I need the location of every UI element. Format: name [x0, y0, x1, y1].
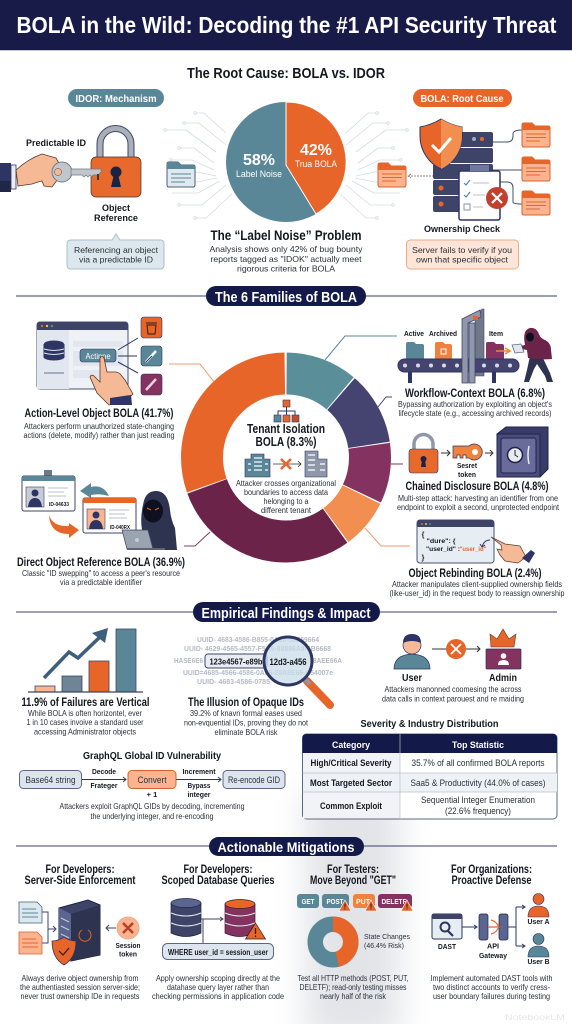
table: severity and industry: Common Exploit — [320, 801, 382, 811]
donut centre: tenant isolation: boundaries to access data — [244, 488, 328, 497]
panel: proactive defense: User A — [528, 917, 550, 926]
flow diagram: graphql global ID: the underlying integer, and re-encoding — [90, 811, 214, 821]
section heading: 6 families — [16, 286, 557, 306]
icon: server, shield, clipboard, folders: Ownership Check — [424, 224, 501, 235]
section heading: mitigations — [16, 837, 557, 856]
table: severity and industry — [302, 734, 557, 819]
panel: move beyond GET: POST — [326, 897, 344, 906]
panel: scoped database queries: WHERE user_id = session_user — [168, 948, 268, 957]
panel: workflow-context BOLA — [398, 309, 553, 418]
panel: illusion of opaque IDs: UUID- 4683-4586-B855-0A66-58E59664 — [197, 635, 320, 644]
heading: root cause: The Root Cause: BOLA vs. IDOR — [187, 65, 385, 82]
panel: action-level object BOLA — [24, 317, 175, 440]
callout: referencing an object — [67, 234, 164, 269]
panel: action-level object BOLA: Actinne — [86, 352, 111, 361]
panel: server-side enforcement — [19, 864, 141, 1001]
panel: proactive defense: two distinct accounts to verify cress- — [433, 982, 550, 992]
badge: IDOR mechanism — [68, 89, 164, 107]
panel: direct object reference BOLA: ID-040RX — [110, 525, 131, 531]
panel: server-side enforcement: the authentiasted session server-side; — [20, 982, 140, 992]
donut centre: tenant isolation: Tenant Isolation — [247, 422, 325, 436]
panel: action-level object BOLA: actions (delete, modify) rather than just reading — [24, 430, 175, 440]
panel: illusion of opaque IDs: The Illusion of Opaque IDs — [188, 697, 304, 709]
panel: move beyond GET: Move Beyond "GET" — [310, 875, 396, 887]
panel: chained disclosure BOLA — [397, 427, 560, 512]
panel: illusion of opaque IDs: 8AEE66A — [313, 656, 343, 665]
panel: user to admin: data calls in context parouest and re maiding — [382, 694, 524, 704]
panel: chained disclosure BOLA: token — [458, 472, 476, 479]
icon: left folder — [167, 162, 195, 187]
panel: direct object reference BOLA: via a predictable identifier — [60, 577, 142, 587]
panel: object rebinding BOLA — [390, 520, 565, 598]
badge: BOLA root cause: BOLA: Root Cause — [420, 93, 504, 105]
panel: scoped database queries: For Developers: — [184, 864, 252, 876]
bar chart: vertical failures — [22, 628, 150, 736]
donut centre: tenant isolation: different tenant — [261, 506, 312, 515]
panel: illusion of opaque IDs: HASE6E6 — [174, 656, 203, 665]
panel: server-side enforcement: For Developers: — [46, 864, 114, 876]
panel: proactive defense: For Organizations: — [451, 864, 532, 876]
table: severity and industry: Saa5 & Productivity (44.0% of cases) — [410, 778, 546, 788]
flow diagram: graphql global ID: Increment — [182, 767, 216, 776]
donut centre: tenant isolation: Attacker crosses organizational — [236, 479, 336, 488]
pie chart: label noise: 58% — [243, 152, 275, 169]
panel: object rebinding BOLA: "user_id" — [460, 546, 486, 553]
panel: illusion of opaque IDs — [174, 635, 343, 737]
panel: server-side enforcement: token — [119, 950, 137, 958]
panel: illusion of opaque IDs: 39.2% of knavn formal eases used — [190, 708, 302, 718]
watermark: NotebookLM — [505, 1013, 565, 1022]
callout: server fails: Server fails to verify if you — [412, 245, 512, 255]
pie chart: label noise: Trua BOLA — [295, 159, 338, 170]
panel: server-side enforcement: Session — [116, 941, 141, 950]
panel: proactive defense: User B — [528, 957, 550, 966]
badge: IDOR mechanism: IDOR: Mechanism — [76, 93, 156, 105]
panel: workflow-context BOLA: Workflow-Context BOLA (6.8%) — [405, 388, 545, 400]
donut centre: tenant isolation: BOLA (8.3%) — [256, 435, 316, 449]
callout: referencing an object: via a predictable ID — [79, 254, 153, 264]
flow diagram: graphql global ID: Re-encode GID — [228, 775, 280, 786]
panel: move beyond GET: PUT — [356, 897, 370, 906]
panel: proactive defense: Gateway — [479, 951, 508, 960]
panel: scoped database queries: Apply ownership scoping directly at the — [156, 973, 280, 983]
circuit lines — [164, 112, 408, 219]
panel: server-side enforcement: Always derive object ownership from — [22, 973, 138, 983]
leader lines — [169, 336, 410, 546]
donut chart: 6 families — [202, 374, 370, 542]
panel: direct object reference BOLA: Direct Object Reference BOLA (36.9%) — [17, 557, 185, 569]
callout: server fails: own that specific object — [416, 254, 509, 264]
table: severity and industry: Most Targeted Sector — [310, 778, 392, 788]
panel: illusion of opaque IDs: non-evquential IDs, proving they do not — [184, 718, 309, 728]
bar chart: vertical failures: 1 in 10 cases invoive a standard user — [26, 717, 144, 727]
panel: scoped database queries: checking permissions in application code — [152, 991, 284, 1001]
icon: right folder — [378, 163, 406, 187]
panel: illusion of opaque IDs: eliminate BOLA risk — [214, 727, 278, 737]
bar chart: vertical failures: 11.9% of Failures are Vertical — [22, 697, 150, 709]
panel: move beyond GET: DELETF — [382, 897, 407, 906]
table: severity and industry: High/Critical Severity — [310, 758, 392, 768]
flow diagram: graphql global ID — [20, 767, 285, 821]
callout: server fails — [406, 240, 518, 269]
flow diagram: graphql global ID: Bypass — [188, 781, 210, 790]
panel: scoped database queries — [152, 864, 284, 1001]
panel: scoped database queries: Scoped Database Queries — [162, 875, 274, 887]
panel: illusion of opaque IDs: UUID- 4683-4586-0785 — [197, 677, 270, 686]
panel: direct object reference BOLA: ID-04633 — [49, 502, 69, 508]
panel: move beyond GET: nearly half of the risk — [320, 991, 387, 1001]
section heading: mitigations: Actionable Mitigations — [218, 839, 355, 855]
flow diagram: graphql global ID: Frateger — [90, 781, 118, 790]
panel: proactive defense: DAST — [438, 942, 456, 951]
panel: proactive defense: user boundary failures during testing — [433, 991, 550, 1001]
icon: server, shield, clipboard, folders — [408, 119, 550, 235]
section heading: 6 families: The 6 Families of BOLA — [215, 289, 357, 306]
panel: action-level object BOLA: Action-Level Object BOLA (41.7%) — [24, 408, 174, 420]
panel: user to admin: Admin — [489, 672, 517, 684]
bar chart: vertical failures: While BOLA is often horizontel, ever — [28, 708, 142, 718]
panel: user to admin: User — [402, 672, 422, 684]
panel: user to admin: Attackers manonned coomesing the across — [384, 684, 522, 694]
panel: move beyond GET: DELETF); read-only testing misses — [300, 982, 406, 992]
icon: hand with key and padlock: Object — [102, 203, 130, 213]
flow diagram: graphql global ID: Convert — [138, 775, 167, 786]
table: severity and industry: Sequential Integer Enumeration — [421, 795, 535, 805]
panel: workflow-context BOLA: Active — [404, 331, 424, 338]
panel: object rebinding BOLA: "dure": { — [426, 538, 456, 545]
panel: direct object reference BOLA: Classic "ID swepping" to access a peer's resource — [22, 568, 180, 578]
text: label noise problem: Analysis shows only 42% of bug bounty — [210, 244, 363, 254]
text: label noise problem: reports tagged as "IDOK" actually meet — [210, 254, 362, 264]
donut centre: tenant isolation: helonging to a — [264, 497, 309, 506]
panel: object rebinding BOLA: { — [422, 532, 425, 539]
icon: hand with key and padlock: Reference — [94, 213, 138, 223]
panel: illusion of opaque IDs: UUID- 4629-4565-4557-F5A5-88886A8-5B6668 — [184, 644, 331, 653]
pie chart: label noise: 42% — [300, 142, 332, 159]
panel: proactive defense — [430, 864, 553, 1001]
table: severity and industry: Top Statistic — [452, 740, 504, 751]
panel: object rebinding BOLA: } — [422, 555, 425, 562]
panel: object rebinding BOLA: "user_id" : — [426, 546, 460, 553]
panel: server-side enforcement: Server-Side Enforcement — [24, 875, 136, 887]
pie chart: label noise: Label Noise — [236, 169, 282, 180]
section heading: empirical findings: Empirical Findings & Impact — [202, 605, 371, 622]
panel: move beyond GET: (46.4% Risk) — [364, 941, 404, 950]
panel: user to admin — [382, 629, 524, 704]
text: label noise problem: The “Label Noise” Problem — [210, 227, 362, 243]
bar chart: vertical failures: accessing Administrator objects — [34, 726, 136, 736]
panel: scoped database queries: datahase query layer rather than — [167, 982, 269, 992]
table: severity and industry: (22.6% frequency) — [445, 806, 511, 816]
flow diagram: graphql global ID: Attackers exploit GraphQL GIDs by decoding, incrementing — [60, 801, 245, 811]
panel: chained disclosure BOLA: Sesret — [457, 463, 478, 470]
panel: proactive defense: Proactive Defense — [452, 875, 532, 887]
panel: illusion of opaque IDs: 12d3-a456 — [270, 657, 306, 667]
panel: move beyond GET: Test all HTTP methods (POST, PUT, — [298, 973, 408, 983]
panel: move beyond GET: GET — [302, 897, 315, 906]
flow diagram: graphql global ID: integer — [188, 790, 211, 799]
panel: direct object reference BOLA — [17, 470, 185, 587]
table: severity and industry: 35.7% of all confirmed BOLA reports — [412, 758, 545, 768]
flow diagram: graphql global ID: Decode — [92, 767, 116, 776]
badge: BOLA root cause — [413, 89, 512, 107]
panel: proactive defense: API — [487, 942, 499, 950]
panel: workflow-context BOLA: Item — [489, 331, 503, 338]
callout: referencing an object: Referencing an object — [74, 245, 159, 255]
panel: proactive defense: Implement automated DAST tools with — [430, 973, 553, 983]
text: label noise problem: rigorous criteria for BOLA — [237, 264, 335, 274]
icon: hand with key and padlock — [0, 128, 141, 223]
section heading: empirical findings — [16, 602, 557, 622]
donut centre: tenant isolation — [236, 400, 336, 515]
flow diagram: graphql global ID: Base64 string — [26, 775, 76, 786]
heading: graphql: GraphQL Global ID Vulnerability — [83, 750, 221, 762]
icon: hand with key and padlock: Predictable ID — [26, 138, 86, 148]
panel: workflow-context BOLA: Archived — [429, 331, 457, 338]
panel: move beyond GET: State Changes — [364, 932, 410, 941]
panel: object rebinding BOLA: Object Rebinding BOLA (2.4%) — [408, 568, 542, 580]
panel: action-level object BOLA: Attackers perform unauthorized state-changing — [24, 421, 174, 431]
text: label noise problem — [210, 227, 363, 274]
table: severity and industry: Category — [332, 740, 371, 751]
flow diagram: graphql global ID: + 1 — [147, 790, 157, 799]
panel: illusion of opaque IDs: 123e4567-e89b — [210, 656, 262, 666]
pie chart: label noise — [226, 102, 346, 222]
panel: server-side enforcement: never trust ownership IDe in requests — [20, 991, 140, 1001]
header band — [0, 0, 572, 51]
heading: severity distribution: Severity & Industry Distribution — [360, 718, 498, 730]
panel: move beyond GET: For Testers: — [327, 864, 379, 876]
panel: illusion of opaque IDs: UUID=4685-4566-4586-0A66-28A8E66-A54007e — [183, 668, 333, 677]
panel: move beyond GET — [297, 864, 413, 1001]
